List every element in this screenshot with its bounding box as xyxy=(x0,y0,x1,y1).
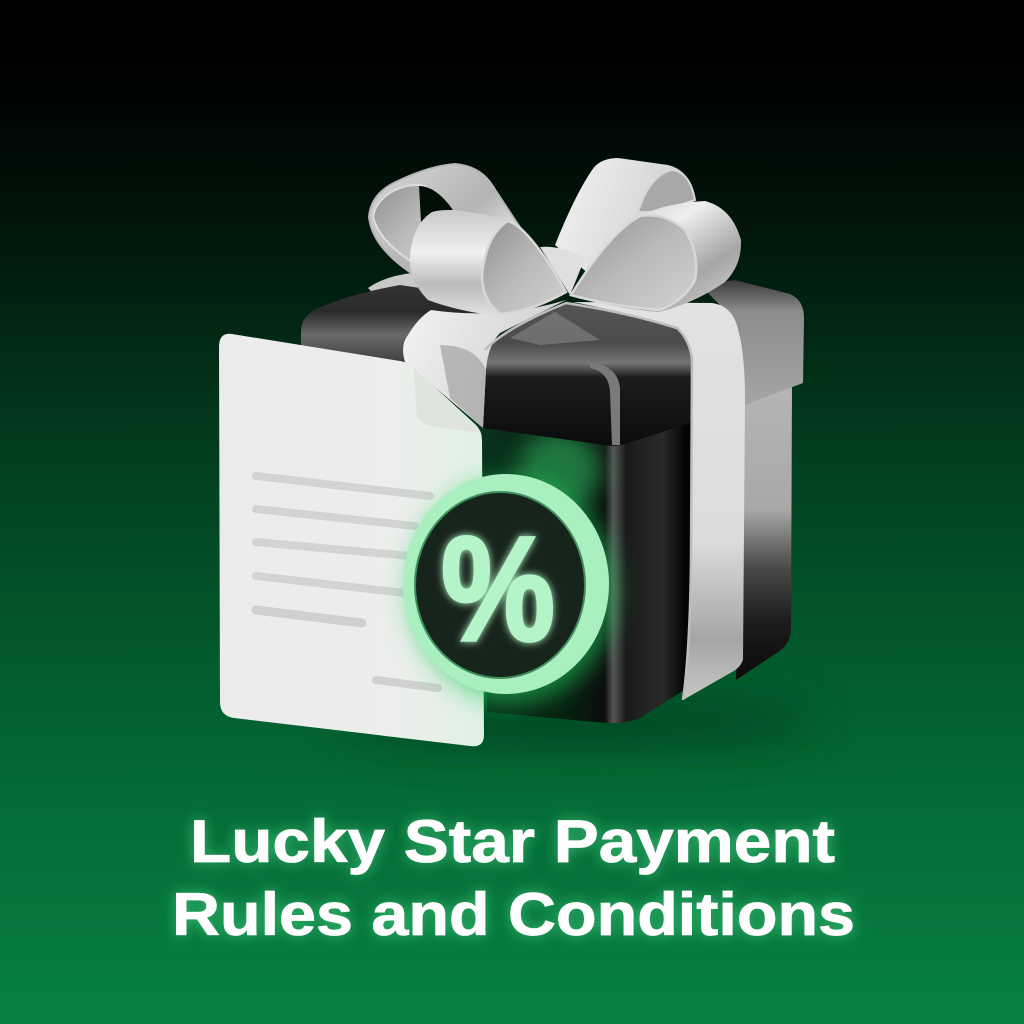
box right side face xyxy=(736,385,792,680)
bow xyxy=(369,158,741,316)
gift box illustration xyxy=(301,158,804,723)
percent sign: % xyxy=(441,507,555,672)
badge glow xyxy=(408,478,616,702)
back left loop xyxy=(369,164,525,300)
ribbon right xyxy=(573,302,745,700)
back left loop opening xyxy=(373,185,452,262)
badge ring xyxy=(403,474,609,694)
front right loop xyxy=(571,201,741,312)
box front face xyxy=(480,420,695,723)
page fold xyxy=(414,368,479,432)
front left opening xyxy=(482,221,566,314)
front left loop xyxy=(410,210,566,316)
lid top left section xyxy=(301,285,500,375)
lid xyxy=(301,273,804,446)
title xyxy=(172,808,855,948)
title line 2: Rules and Conditions xyxy=(172,881,855,948)
text lines on paper xyxy=(256,476,438,688)
lid top glossy reflection xyxy=(510,312,600,345)
back right loop xyxy=(555,158,695,275)
ribbon on lid left xyxy=(403,300,566,428)
floor shadow xyxy=(340,698,820,746)
lid front corner highlight xyxy=(590,362,620,445)
badge inner disc xyxy=(415,492,585,678)
lid right section xyxy=(700,280,804,405)
back right opening xyxy=(638,170,695,212)
back left hole xyxy=(419,186,453,222)
percent badge xyxy=(403,474,616,702)
lid rear silver ribbon edge xyxy=(368,273,420,292)
green reflection on box front xyxy=(518,430,602,510)
rear flat ribbon xyxy=(615,265,692,290)
ribbon shading xyxy=(440,345,486,428)
front right opening xyxy=(571,215,696,310)
ribbon metallic edge xyxy=(485,303,692,700)
title line 1: Lucky Star Payment xyxy=(190,808,835,875)
paper sheet xyxy=(219,334,484,746)
bow knot bar xyxy=(540,247,585,295)
lid front panel xyxy=(483,303,692,446)
document xyxy=(219,334,484,746)
